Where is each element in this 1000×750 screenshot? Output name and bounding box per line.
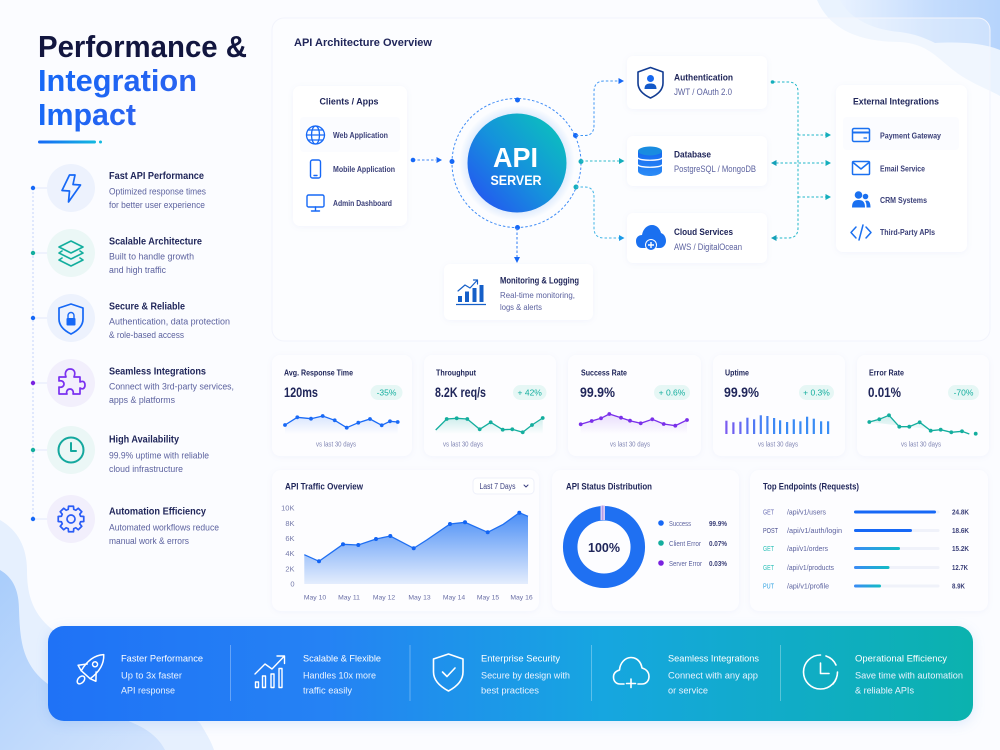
benefit: high availability: cloud infrastructure <box>109 464 183 474</box>
benefit: high availability: 99.9% uptime with reliable <box>109 450 209 460</box>
icon: clock <box>58 438 84 462</box>
card: authentication <box>627 56 767 109</box>
icon: shield with lock <box>59 304 83 334</box>
area chart: May 11 <box>338 594 360 602</box>
arrow: api to monitoring <box>514 228 520 263</box>
benefit: operational efficiency: & reliable APIs <box>855 686 914 696</box>
kpi card: average response time: 120ms <box>284 384 318 400</box>
benefit: scalable architecture: Scalable Architecture <box>109 236 202 248</box>
icon: cloud with plus <box>636 225 666 250</box>
sparkline <box>579 412 689 434</box>
kpi card: error rate: 0.01% <box>868 384 901 400</box>
dropdown: last 7 days <box>473 478 534 494</box>
benefit: fast api performance: for better user experience <box>109 200 205 210</box>
benefit: scalable and flexible: Scalable & Flexible <box>303 654 381 664</box>
card: clients and apps <box>293 86 407 226</box>
endpoint rows <box>763 508 969 590</box>
endpoint rows: 18.6K <box>952 526 969 535</box>
icon: payment card <box>852 128 870 142</box>
card: monitoring and logging: Real-time monitoring, <box>500 290 575 300</box>
card: database: Database <box>674 150 711 160</box>
kpi card: uptime: + 0.3% <box>803 388 830 398</box>
legend: 0.03% <box>709 559 727 568</box>
kpi card: uptime: Uptime <box>725 368 749 378</box>
kpi card: success rate: + 0.6% <box>659 388 686 398</box>
benefit: high availability <box>31 426 209 474</box>
icon: rocket <box>69 647 113 691</box>
benefit: faster performance <box>69 647 203 696</box>
area chart: May 15 <box>477 594 499 602</box>
area chart: May 10 <box>304 594 326 602</box>
panel: api traffic overview <box>272 470 539 611</box>
icon: shield with check <box>434 654 463 691</box>
icon: puzzle piece <box>59 369 85 394</box>
icon: layers <box>59 241 83 266</box>
legend <box>658 519 727 568</box>
icon: bar chart with arrow <box>456 280 486 304</box>
card: monitoring and logging: Monitoring & Logging <box>500 276 579 286</box>
icon: shield with user <box>638 68 663 98</box>
kpi card: throughput: Throughput <box>436 368 476 378</box>
benefit: scalable architecture: and high traffic <box>109 265 166 275</box>
card: external integrations: Third-Party APIs <box>880 228 935 237</box>
benefit: scalable architecture <box>31 229 202 277</box>
area chart: 8K <box>285 519 294 528</box>
benefit: seamless integrations: Seamless Integrations <box>668 654 759 664</box>
kpi card: success rate: 99.9% <box>580 384 615 400</box>
title <box>38 29 247 144</box>
benefit: operational efficiency: Operational Efficiency <box>855 654 947 664</box>
icon: clock <box>804 655 838 689</box>
card: clients and apps: Web Application <box>333 131 388 140</box>
legend: 0.07% <box>709 539 727 548</box>
benefit: operational efficiency: Save time with automation <box>855 670 963 682</box>
legend: Success <box>669 519 691 528</box>
card: authentication: Authentication <box>674 72 733 84</box>
benefit: enterprise security: Secure by design with <box>481 670 570 682</box>
area chart: 0 <box>290 580 294 588</box>
endpoint rows: /api/v1/products <box>787 565 834 572</box>
icon: database cylinder <box>638 146 662 176</box>
card: external integrations <box>836 85 967 252</box>
icon: cloud with plus <box>614 658 649 688</box>
benefit: enterprise security: Enterprise Security <box>481 654 560 664</box>
legend: Server Error <box>669 559 702 568</box>
area chart: 2K <box>285 564 294 574</box>
kpi card: error rate <box>857 355 989 456</box>
benefit: scalable and flexible <box>255 654 381 696</box>
title: Impact <box>38 97 136 132</box>
benefit: operational efficiency <box>804 654 963 696</box>
card: external integrations: Email Service <box>880 164 925 174</box>
benefit: seamless integrations <box>31 359 234 407</box>
benefit: high availability: High Availability <box>109 434 179 446</box>
card: clients and apps: Admin Dashboard <box>333 199 392 208</box>
card: authentication: JWT / OAuth 2.0 <box>674 87 732 97</box>
kpi card: throughput: vs last 30 days <box>443 442 483 448</box>
kpi card: uptime: vs last 30 days <box>758 442 798 448</box>
icon: globe <box>306 126 324 144</box>
benefit: seamless integrations <box>614 654 759 696</box>
card: cloud services: AWS / DigitalOcean <box>674 242 742 252</box>
endpoint rows: /api/v1/profile <box>787 584 829 590</box>
kpi card: error rate: Error Rate <box>869 368 904 378</box>
card: external integrations: CRM Systems <box>880 196 927 205</box>
kpi card: average response time: Avg. Response Time <box>284 368 353 378</box>
donut chart <box>570 506 638 581</box>
panel: api status distribution <box>552 470 739 611</box>
api server hub <box>450 98 584 230</box>
kpi card: throughput: 8.2K req/s <box>435 384 486 400</box>
icon: mobile phone <box>310 160 320 178</box>
benefit: secure and reliable: & role-based access <box>109 330 184 340</box>
legend: Client Error <box>669 539 701 548</box>
panel: top endpoints: Top Endpoints (Requests) <box>763 482 859 492</box>
endpoint rows: GET <box>763 565 775 572</box>
icon: code brackets <box>851 225 871 240</box>
kpi card: uptime <box>713 355 845 456</box>
title: Performance & <box>38 29 247 64</box>
card: external integrations: External Integrations <box>853 96 939 108</box>
icon: monitor <box>307 195 324 211</box>
benefit: scalable and flexible: Handles 10x more <box>303 670 376 682</box>
panel: api architecture <box>272 18 990 341</box>
benefit: enterprise security: best practices <box>481 686 539 696</box>
endpoint rows: PUT <box>763 584 775 590</box>
panel: api status distribution: API Status Distribution <box>566 482 652 492</box>
arrow: api to database <box>581 158 624 164</box>
endpoint rows: 24.8K <box>952 508 969 516</box>
benefit: fast api performance: Optimized response times <box>109 186 206 196</box>
icon: people <box>852 191 870 208</box>
benefit: automation efficiency: manual work & errors <box>109 536 189 546</box>
area chart: May 12 <box>373 594 395 602</box>
arrow: api to cloud services <box>576 187 624 241</box>
endpoint rows: /api/v1/auth/login <box>787 528 842 535</box>
benefit: automation efficiency: Automated workflows reduce <box>109 522 219 532</box>
benefit: fast api performance: Fast API Performance <box>109 170 204 182</box>
benefit: scalable architecture: Built to handle growth <box>109 252 194 262</box>
area chart: May 16 <box>510 594 533 602</box>
kpi card: average response time <box>272 355 412 456</box>
panel: api traffic overview: API Traffic Overview <box>285 482 364 492</box>
icon: gear <box>58 506 84 532</box>
card: database: PostgreSQL / MongoDB <box>674 164 756 174</box>
benefit: enterprise security <box>434 654 570 696</box>
donut chart: 100% <box>588 540 620 555</box>
kpi card: throughput: + 42% <box>518 388 542 398</box>
api server hub: SERVER <box>490 173 542 188</box>
api server hub: API <box>493 142 538 173</box>
benefit: automation efficiency: Automation Efficiency <box>109 506 206 518</box>
endpoint rows: 15.2K <box>952 544 969 553</box>
icon: lightning bolt <box>62 175 80 202</box>
kpi card: error rate: vs last 30 days <box>901 442 941 448</box>
card: database <box>627 136 767 186</box>
card: monitoring and logging: logs & alerts <box>500 302 542 312</box>
sparkline <box>436 416 545 434</box>
bar sparkline <box>725 415 829 434</box>
sparkline <box>867 413 978 436</box>
benefit: seamless integrations: apps & platforms <box>109 395 175 405</box>
benefit: seamless integrations: Seamless Integrations <box>109 366 206 378</box>
icon: envelope <box>852 162 870 174</box>
area chart: 6K <box>285 534 294 543</box>
endpoint rows: 8.9K <box>952 582 965 590</box>
kpi card: average response time: -35% <box>377 388 397 398</box>
card: monitoring and logging <box>444 264 593 320</box>
benefit: faster performance: Faster Performance <box>121 654 203 664</box>
connectors: services to external integrations <box>771 80 831 241</box>
benefit: secure and reliable: Secure & Reliable <box>109 300 185 312</box>
icon: growth chart <box>255 656 284 688</box>
area chart: 10K <box>281 504 294 512</box>
benefit: fast api performance <box>31 164 206 212</box>
kpi card: throughput <box>424 355 556 456</box>
panel heading: API Architecture Overview <box>294 37 432 49</box>
kpi card: success rate: Success Rate <box>581 368 627 378</box>
kpi card: uptime: 99.9% <box>724 384 759 400</box>
endpoint rows: GET <box>763 546 775 553</box>
arrow: clients to api <box>411 157 442 163</box>
panel: top endpoints <box>750 470 988 611</box>
card: external integrations: Payment Gateway <box>880 132 941 140</box>
benefit: faster performance: API response <box>121 686 175 696</box>
benefit: seamless integrations: Connect with 3rd-party services, <box>109 382 234 392</box>
area chart: May 13 <box>408 594 431 602</box>
legend: 99.9% <box>709 519 727 528</box>
benefit: scalable and flexible: traffic easily <box>303 686 352 696</box>
sparkline <box>283 414 400 434</box>
benefit: automation efficiency <box>31 495 219 546</box>
benefit: faster performance: Up to 3x faster <box>121 670 182 682</box>
banner: benefits <box>48 626 973 721</box>
kpi card: success rate <box>568 355 701 456</box>
benefit: secure and reliable <box>31 294 230 342</box>
card: cloud services <box>627 213 767 263</box>
area chart: 4K <box>285 549 294 558</box>
card: cloud services: Cloud Services <box>674 227 733 238</box>
kpi card: average response time: vs last 30 days <box>316 442 356 448</box>
benefit: secure and reliable: Authentication, data protection <box>109 316 230 326</box>
endpoint rows: /api/v1/users <box>787 510 826 516</box>
kpi card: success rate: vs last 30 days <box>610 442 650 448</box>
card: clients and apps: Clients / Apps <box>320 96 378 108</box>
arrow: api to authentication <box>576 78 624 136</box>
endpoint rows: GET <box>763 510 775 516</box>
kpi card: error rate: -70% <box>954 388 974 398</box>
card: clients and apps: Mobile Application <box>333 165 395 174</box>
area chart: May 14 <box>443 594 465 602</box>
dropdown: last 7 days: Last 7 Days <box>480 482 516 491</box>
benefit: seamless integrations: Connect with any app <box>668 670 758 682</box>
area chart <box>281 504 533 602</box>
endpoint rows: /api/v1/orders <box>787 546 828 553</box>
endpoint rows: POST <box>763 528 779 535</box>
endpoint rows: 12.7K <box>952 563 968 572</box>
title: Integration <box>38 63 197 98</box>
benefit: seamless integrations: or service <box>668 686 708 696</box>
